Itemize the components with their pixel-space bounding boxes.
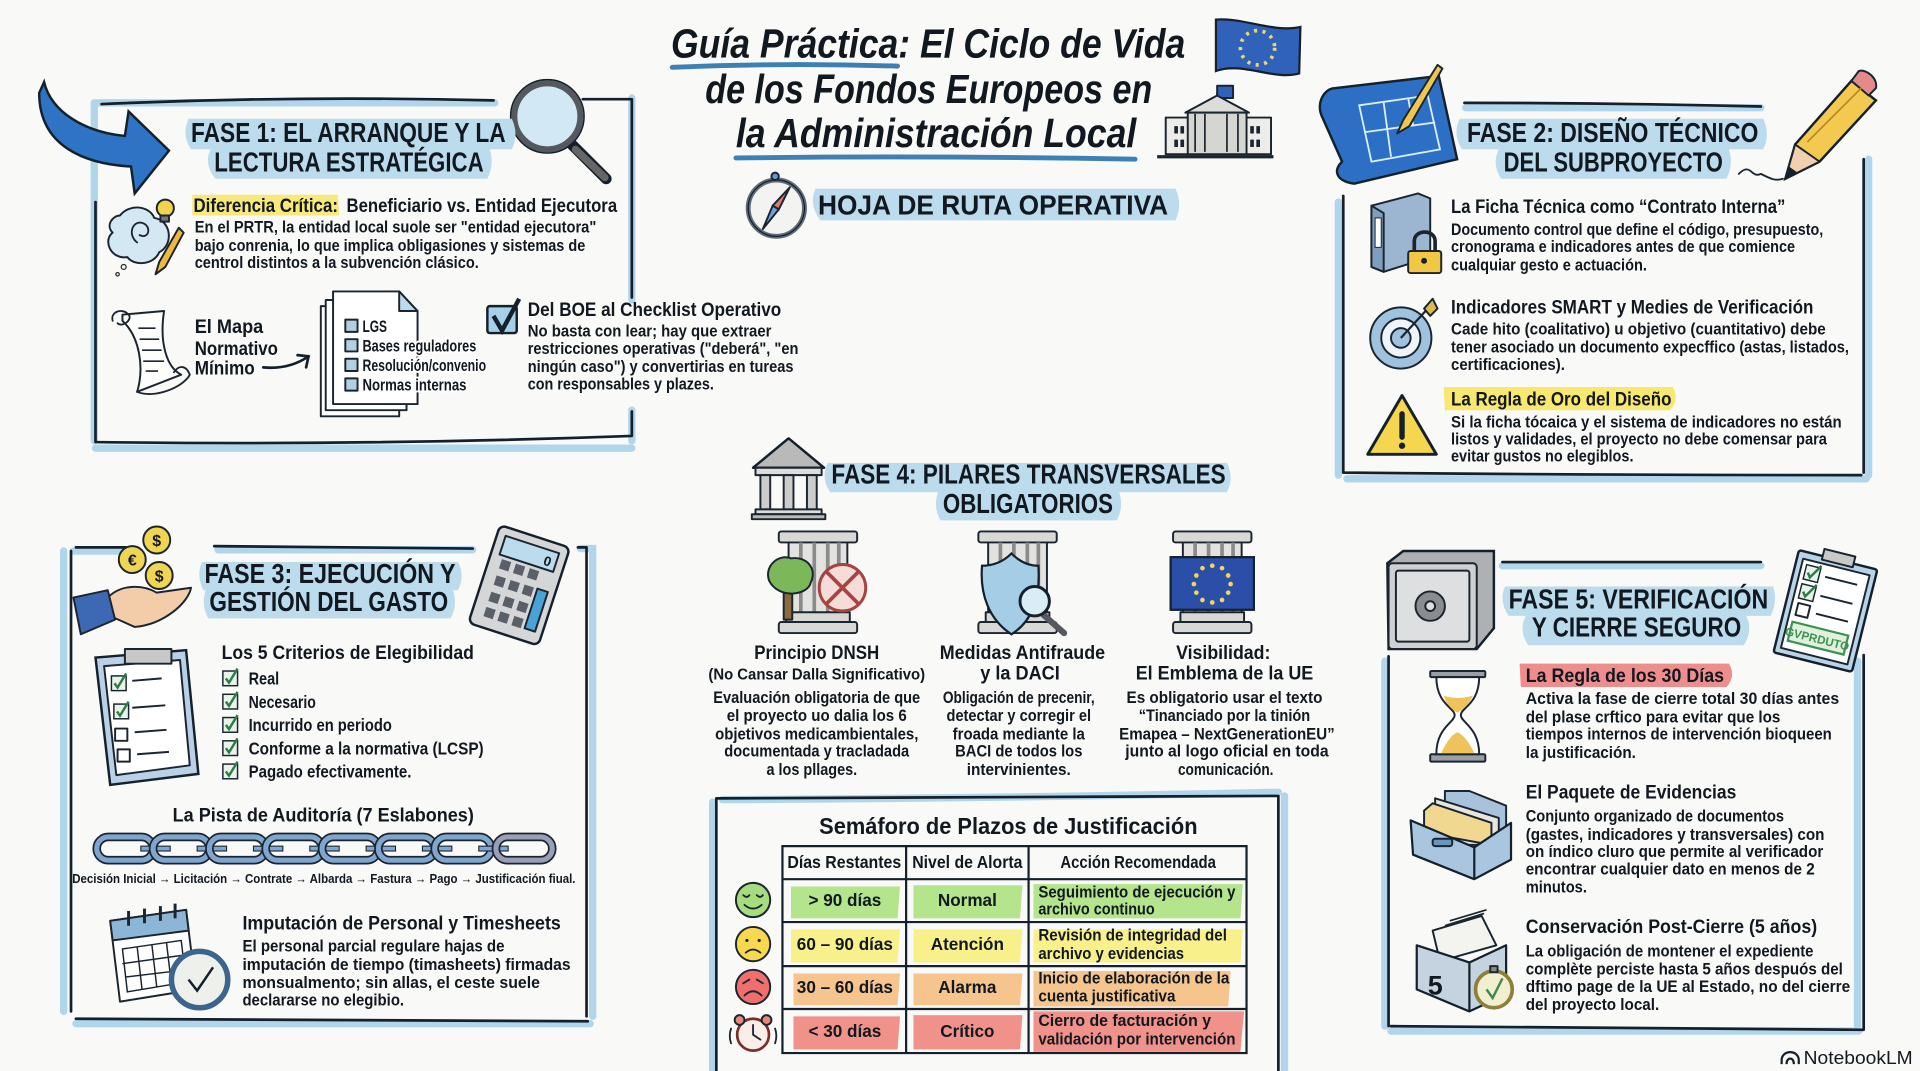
title	[671, 21, 1185, 159]
pillar: antifraude: Obligación de precenir,	[943, 689, 1095, 707]
panel frame	[94, 98, 632, 448]
table: 30 – 60 días	[797, 977, 893, 997]
retention text: dftimo page de la UE al Estado, no del cierre	[1526, 978, 1850, 996]
heading	[825, 459, 1231, 520]
ficha text: cronograma e indicadores antes de que comience	[1451, 238, 1795, 256]
critical difference text	[192, 195, 618, 272]
pillar: visibilidad: comunicación.	[1178, 761, 1273, 779]
retention text: del proyecto local.	[1526, 996, 1659, 1014]
pillar: antifraude: y la DACI	[980, 663, 1060, 685]
heading: Y CIERRE SEGURO	[1532, 612, 1741, 643]
arrow	[263, 355, 309, 368]
table: Acción Recomendada	[1060, 852, 1216, 872]
criteria list	[222, 642, 484, 782]
heading: FASE 5: VERIFICACIÓN	[1509, 584, 1768, 615]
evidence package text: (gastes, indicadores y transversales) con	[1526, 826, 1824, 844]
golden rule: listos y validades, el proyecto no debe comensar para	[1451, 430, 1828, 448]
pillar: DNSH: a los pllages.	[767, 761, 857, 779]
icon: hand with coins: $	[155, 569, 164, 586]
criteria list: Conforme a la normativa (LCSP)	[249, 738, 484, 758]
30 day rule: Activa la fase de cierre total 30 días antes	[1526, 690, 1839, 708]
icon: archive box with stopwatch	[1417, 910, 1512, 1011]
heading: GESTIÓN DEL GASTO	[209, 586, 448, 617]
timesheets text	[242, 912, 571, 1009]
icon: column with EU flag	[1171, 531, 1254, 633]
ficha text: cualquiar gesto e actuación.	[1451, 257, 1647, 275]
pillar: DNSH: el proyecto uo dalia los 6	[727, 707, 907, 725]
icon: warning	[1368, 396, 1436, 454]
table	[782, 846, 1247, 1053]
ficha text	[1451, 196, 1823, 275]
pillar: visibilidad: Es obligatorio usar el texto	[1127, 689, 1323, 707]
heading	[185, 117, 516, 179]
table: archivo continuo	[1038, 901, 1155, 919]
pillar: visibilidad: junto al logo oficial en toda	[1124, 743, 1330, 761]
icon: hand with coins: €	[128, 553, 137, 570]
heading	[199, 558, 462, 618]
icon: locked binder	[1371, 193, 1441, 273]
document stack: Bases reguladores	[362, 337, 476, 355]
audit trail chain: La Pista de Auditoría (7 Eslabones)	[173, 805, 474, 827]
pillar: visibilidad: El Emblema de la UE	[1136, 663, 1313, 685]
title: la Administración Local	[736, 110, 1137, 156]
table: Nivel de Alorta	[912, 852, 1023, 872]
table: Crítico	[940, 1021, 994, 1041]
30 day rule: la justificación.	[1526, 744, 1636, 762]
evidence package text: on índico cluro que permite al verificador	[1526, 843, 1824, 861]
table: 60 – 90 días	[797, 934, 893, 954]
icon: large pencil	[1739, 71, 1876, 180]
NotebookLM logo: NotebookLM	[1804, 1047, 1913, 1068]
30 day rule: del plase crftico para evitar que los	[1526, 708, 1780, 726]
subtitle: hoja de ruta	[748, 173, 1179, 236]
panel: semáforo de plazos	[713, 792, 1284, 1071]
icon: big checkbox	[487, 299, 519, 333]
icon: compass	[748, 173, 804, 236]
evidence package text: Conjunto organizado de documentos	[1526, 808, 1784, 826]
indicators text: tener asociado un documento expecffico (astas, listados,	[1451, 339, 1849, 357]
panel: fase 3	[64, 525, 593, 1024]
grid	[782, 846, 1247, 1053]
critical difference text: Diferencia Crítica:	[193, 195, 338, 217]
pillar: antifraude: froada mediante la	[953, 726, 1086, 744]
icon: EU flag	[1216, 19, 1300, 75]
icon: green face	[736, 883, 770, 917]
icon: yellow face	[736, 927, 770, 961]
pillar: antifraude: detectar y corregir el	[947, 707, 1091, 725]
heading: FASE 2: DISEÑO TÉCNICO	[1467, 117, 1758, 148]
heading: LECTURA ESTRATÉGICA	[214, 146, 484, 177]
icon: hand with coins: $	[152, 533, 161, 550]
pillar: visibilidad	[1119, 531, 1335, 779]
heading: DEL SUBPROYECTO	[1504, 146, 1723, 177]
normative map label: Normativo	[195, 338, 278, 360]
criteria list: Los 5 Criterios de Elegibilidad	[222, 642, 474, 664]
retention text	[1526, 916, 1850, 1014]
table: Seguimiento de ejecución y	[1038, 884, 1236, 902]
indicators text: Cade hito (coalitativo) u objetivo (cuantitativo) debe	[1451, 320, 1826, 338]
icon: magnifier	[511, 80, 606, 179]
normative map label: Mínimo	[195, 358, 255, 380]
pillar: antifraude	[940, 531, 1105, 779]
heading	[1456, 117, 1767, 179]
checklist text: con responsables y plazes.	[528, 375, 714, 393]
30 day rule: tiempos internos de intervención bioqueen	[1526, 726, 1832, 744]
table: Inicio de elaboración de la	[1038, 969, 1230, 987]
normative map label	[195, 316, 278, 380]
checklist text: restricciones operativas ("deberá", "en	[528, 340, 798, 358]
retention text: complète perciste hasta 5 años despuós del	[1526, 961, 1843, 979]
pillar: antifraude: intervinientes.	[967, 761, 1071, 779]
icon: thought cloud, bulb and pencil	[108, 200, 184, 276]
panel frame	[713, 792, 1284, 1071]
pillar: DNSH	[708, 531, 925, 779]
icon: column with shield and magnifier	[978, 531, 1064, 634]
30 day rule: La Regla de los 30 Días	[1526, 665, 1724, 687]
checklist text: ningún caso") y convertirias en tureas	[528, 358, 793, 376]
panel frame	[1385, 562, 1864, 1031]
heading: FASE 4: PILARES TRANSVERSALES	[831, 459, 1226, 490]
ficha text: La Ficha Técnica como “Contrato Interna”	[1451, 196, 1785, 218]
timesheets text: monsualmento; sin allas, el ceste suele	[242, 974, 540, 992]
icon: blue arrow	[39, 82, 169, 193]
golden rule: Si la ficha tócaica y el sistema de indicadores no están	[1451, 413, 1842, 431]
table: validación por intervención	[1038, 1030, 1236, 1048]
pillar: antifraude: Medidas Antifraude	[940, 642, 1105, 664]
critical difference text: En el PRTR, la entidad local suole ser "entidad ejecutora"	[195, 219, 596, 237]
timesheets text: declararse no elegibio.	[242, 991, 404, 1009]
icon: red face	[736, 970, 770, 1004]
golden rule: evitar gustos no elegiblos.	[1451, 448, 1633, 466]
heading: FASE 3: EJECUCIÓN Y	[204, 558, 456, 589]
normative map label: El Mapa	[195, 316, 264, 338]
critical difference text: Beneficiario vs. Entidad Ejecutora	[347, 195, 618, 217]
icon: file box	[1411, 791, 1511, 879]
pillar: DNSH: (No Cansar Dalla Significativo)	[708, 667, 925, 684]
icon: alarm clock	[730, 1015, 776, 1051]
evidence package text: minutos.	[1526, 879, 1587, 897]
panel: fase 2	[1320, 65, 1876, 479]
table: archivo y evidencias	[1038, 945, 1184, 963]
panel frame	[1338, 103, 1869, 479]
heading: OBLIGATORIOS	[943, 488, 1113, 519]
icon: scroll	[112, 311, 190, 394]
icon: calendar with check	[110, 904, 228, 1008]
table: Atención	[931, 934, 1004, 954]
icon: calculator	[468, 525, 570, 646]
table: Días Restantes	[787, 852, 901, 872]
critical difference text: bajo conrenia, lo que implica obligasiones y sistemas de	[195, 237, 585, 255]
checklist text	[528, 299, 798, 393]
icon: column with tree and crossed circle	[768, 531, 866, 633]
pillar: visibilidad: Emapea – NextGenerationEU”	[1119, 726, 1335, 744]
evidence package text	[1526, 781, 1824, 897]
icon: government building	[1157, 86, 1273, 157]
panel frame	[64, 546, 593, 1024]
icon: archive box with stopwatch: 5	[1428, 970, 1443, 1000]
criteria list: Pagado efectivamente.	[249, 762, 411, 782]
pillar: DNSH: documentada y tracladada	[724, 743, 910, 761]
document stack: LGS	[362, 318, 387, 336]
heading: FASE 1: EL ARRANQUE Y LA	[191, 117, 506, 148]
golden rule: La Regla de Oro del Diseño	[1451, 388, 1671, 410]
icon: safe	[1387, 551, 1494, 649]
timesheets text: Imputación de Personal y Timesheets	[242, 912, 561, 934]
criteria list: Real	[249, 668, 279, 688]
indicators text	[1451, 296, 1849, 374]
audit trail chain	[72, 805, 576, 886]
heading	[1503, 584, 1775, 645]
title: Guía Práctica: El Ciclo de Vida	[671, 21, 1185, 67]
criteria list: Necesario	[249, 692, 316, 712]
pillar: visibilidad: Visibilidad:	[1176, 642, 1270, 664]
icon: hourglass	[1430, 671, 1485, 762]
pillar: visibilidad: “Tinanciado por la tinión	[1139, 707, 1310, 725]
subtitle: hoja de ruta: HOJA DE RUTA OPERATIVA	[818, 189, 1168, 220]
ficha text: Documento control que define el código, presupuesto,	[1451, 221, 1823, 239]
evidence package text: El Paquete de Evidencias	[1526, 781, 1736, 803]
table: < 30 días	[808, 1021, 881, 1041]
retention text: La obligación de montener el expediente	[1526, 942, 1813, 960]
panel: fase 5	[1385, 543, 1879, 1031]
criteria list: Incurrido en periodo	[249, 715, 392, 735]
icon: hand with coins	[73, 527, 191, 634]
golden rule	[1444, 387, 1842, 466]
pillar: DNSH: Principio DNSH	[754, 642, 879, 664]
row colour washes	[791, 884, 1244, 1052]
icon: target	[1370, 299, 1438, 369]
audit trail chain: Decisión Inicial → Licitación → Contrate → Albarda → Fastura → Pago → Justificación fiual.	[72, 871, 576, 886]
timesheets text: imputación de tiempo (timasheets) firmadas	[242, 956, 571, 974]
checklist text: No basta con lear; hay que extraer	[528, 323, 772, 341]
title: de los Fondos Europeos en	[705, 66, 1152, 112]
panel: fase 1	[39, 80, 798, 448]
icon: temple	[752, 438, 825, 519]
pillar: antifraude: BACI de todos los	[955, 743, 1082, 761]
document stack	[321, 291, 486, 416]
heading: Semáforo de Plazos de Justificación	[819, 813, 1198, 839]
critical difference text: centrol distintos a la subvención clásico.	[195, 254, 479, 272]
timesheets text: El personal parcial regulare hajas de	[242, 937, 505, 955]
table: > 90 días	[808, 890, 881, 910]
icon: approved clipboard	[1773, 543, 1879, 672]
table: Revisión de integridad del	[1038, 926, 1227, 944]
indicators text: Indicadores SMART y Medies de Verificación	[1451, 296, 1813, 318]
icon: blueprint with pencil	[1320, 65, 1457, 184]
pillar: DNSH: Evaluación obligatoria de que	[713, 689, 920, 707]
table: cuenta justificativa	[1038, 988, 1176, 1006]
table: Cierro de facturación y	[1038, 1012, 1211, 1030]
30 day rule	[1520, 664, 1839, 762]
indicators text: certificaciones).	[1451, 356, 1565, 374]
retention text: Conservación Post-Cierre (5 años)	[1526, 916, 1817, 938]
table: Alarma	[938, 977, 997, 997]
panel: fase 4	[708, 438, 1335, 779]
icon: clipboard	[96, 649, 198, 785]
checklist text: Del BOE al Checklist Operativo	[528, 299, 781, 321]
icon: approved clipboard: GVPRDUTO	[1784, 625, 1851, 654]
document stack: Normas internas	[362, 377, 467, 395]
document stack: Resolución/convenio	[362, 357, 486, 375]
pillar: DNSH: objetivos medicambientales,	[715, 726, 918, 744]
evidence package text: encontrar cualquier dato en menos de 2	[1526, 860, 1815, 878]
table: Normal	[938, 890, 997, 910]
icon: calculator: 0	[542, 553, 553, 570]
